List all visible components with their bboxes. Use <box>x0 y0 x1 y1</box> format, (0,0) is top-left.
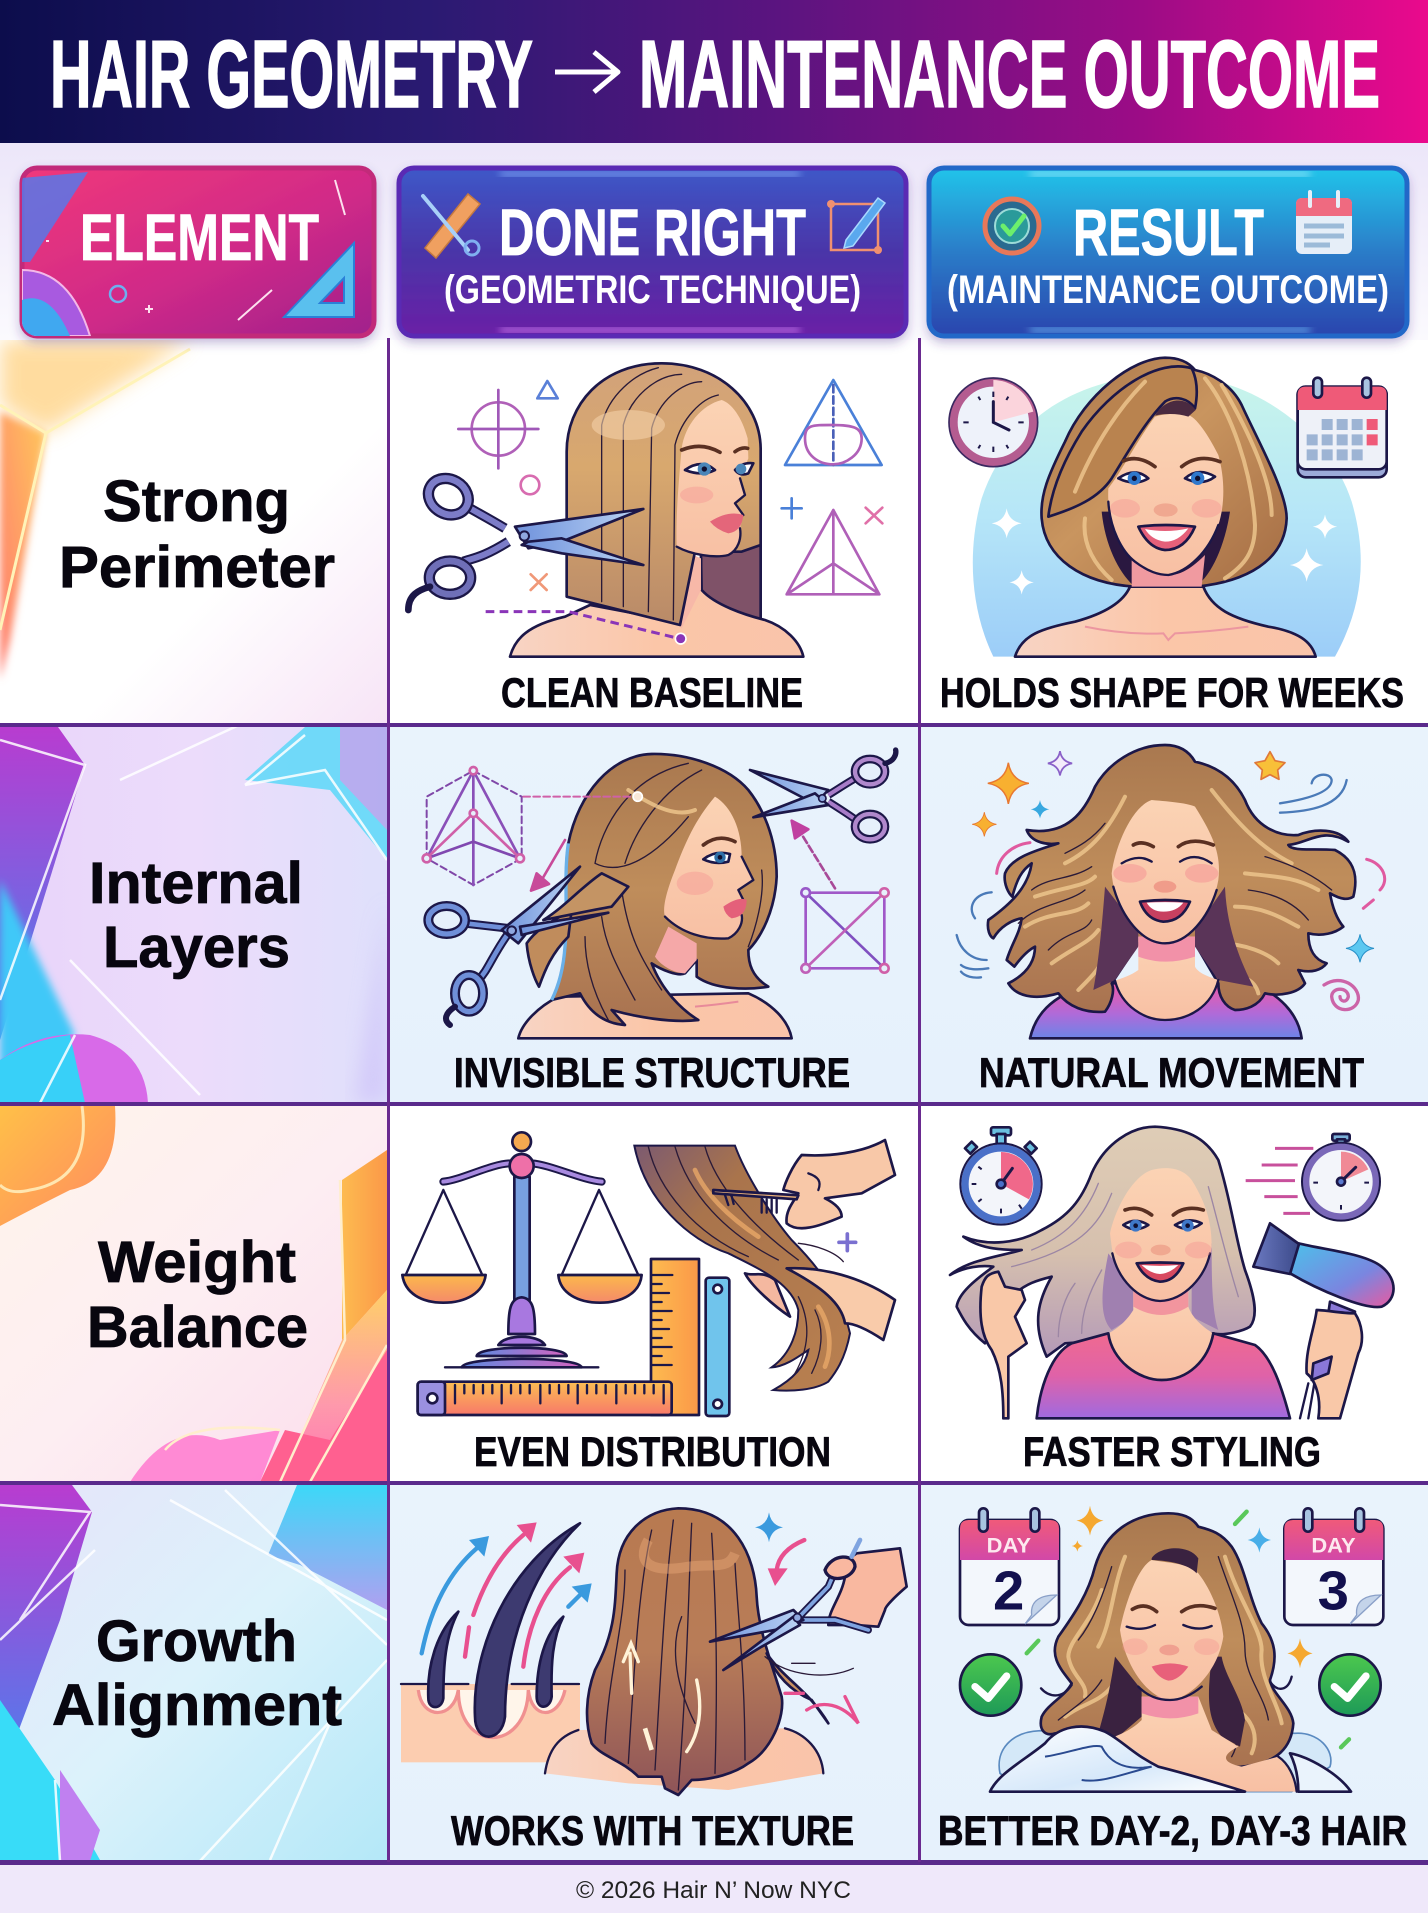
header card: result <box>929 168 1407 336</box>
caption: even distribution: EVEN DISTRIBUTION <box>474 1428 831 1475</box>
title: HAIR GEOMETRY <box>50 21 533 128</box>
geometry <box>423 767 889 973</box>
face <box>1112 800 1219 943</box>
facial features <box>1123 458 1220 467</box>
label: weight balance <box>87 1230 308 1360</box>
title <box>50 21 1380 128</box>
speed lines <box>1246 1148 1313 1213</box>
balance scale <box>402 1132 642 1367</box>
icon: target check <box>985 199 1039 253</box>
label: weight balance: Weight <box>98 1230 296 1295</box>
shoulders <box>518 993 792 1038</box>
neck <box>655 927 697 973</box>
shadow under hair <box>1102 1243 1218 1330</box>
shoulders <box>545 1728 823 1790</box>
L ruler <box>418 1259 699 1415</box>
long hair <box>1041 1513 1293 1767</box>
hair highlights <box>1025 790 1318 993</box>
label: growth alignment: Alignment <box>52 1673 342 1738</box>
side flicks <box>1041 1677 1292 1695</box>
hand with dryer <box>1300 1310 1362 1418</box>
face in profile <box>664 797 753 939</box>
heading: done right: DONE RIGHT <box>499 195 806 269</box>
scissors lower <box>428 867 608 1025</box>
sparkles <box>988 763 1029 804</box>
scissors upper <box>750 750 896 839</box>
title banner <box>0 0 1428 143</box>
header band background <box>0 143 1428 340</box>
label: strong perimeter <box>59 469 335 600</box>
illustration: invisible structure <box>423 750 896 1038</box>
back hair <box>701 512 761 619</box>
caption: faster styling: FASTER STYLING <box>1023 1428 1321 1475</box>
day 3 calendar: DAY <box>1311 1534 1356 1558</box>
shadow under hair <box>1093 887 1253 990</box>
neck and chest <box>1115 1697 1297 1792</box>
scalp cross section <box>401 1523 580 1762</box>
label: growth alignment <box>52 1609 342 1738</box>
dashed baseline <box>486 612 678 638</box>
caption: clean baseline: CLEAN BASELINE <box>501 669 803 716</box>
falling strands <box>767 1653 828 1723</box>
row 4 left panel art <box>0 1485 387 1861</box>
label: strong perimeter: Strong <box>103 469 290 534</box>
halo <box>973 375 1361 657</box>
neck and chest <box>1108 1283 1213 1380</box>
blanket <box>990 1727 1245 1792</box>
caption: natural movement: NATURAL MOVEMENT <box>979 1049 1364 1096</box>
label: weight balance: Balance <box>87 1295 308 1360</box>
layered hair <box>552 754 777 1025</box>
icon: calendar <box>1296 192 1352 254</box>
neck <box>1115 937 1218 1020</box>
illustration: holds shape <box>949 358 1387 657</box>
face <box>1108 414 1223 575</box>
grid lines <box>0 338 1428 1865</box>
row 3 background <box>390 1106 1428 1482</box>
stopwatch left <box>960 1127 1042 1225</box>
sparkles <box>992 508 1022 538</box>
row 1 left panel art <box>0 340 387 725</box>
sparkle <box>839 1234 856 1251</box>
row 4 background <box>390 1485 1428 1861</box>
day 3 calendar: 3 <box>1318 1559 1349 1621</box>
day 3 calendar <box>1284 1508 1383 1625</box>
illustration: natural movement <box>957 745 1385 1038</box>
top hand and comb <box>713 1140 895 1228</box>
caption: works with texture: WORKS WITH TEXTURE <box>451 1807 854 1854</box>
day 2 calendar: DAY <box>987 1534 1031 1558</box>
side tuft <box>527 910 572 987</box>
label: internal layers <box>89 851 303 980</box>
illustration: faster styling <box>950 1127 1394 1418</box>
caption: invisible structure: INVISIBLE STRUCTURE <box>454 1049 850 1096</box>
illustration: clean baseline <box>408 363 882 657</box>
shoulders <box>510 558 803 657</box>
heading: element: ELEMENT <box>80 200 319 274</box>
geometry marks <box>458 380 882 594</box>
blue ruler <box>706 1278 729 1416</box>
header card: element <box>22 168 374 336</box>
raised hand <box>980 1272 1027 1418</box>
heading: result: RESULT <box>1073 195 1264 269</box>
row 2 backgrounds <box>390 727 1428 1103</box>
row 1 background <box>0 340 1428 725</box>
loose strand <box>798 1243 843 1262</box>
clock <box>949 378 1038 467</box>
scissors and hand <box>710 1540 907 1670</box>
face in profile <box>676 400 748 556</box>
face <box>1120 1560 1223 1700</box>
check badges <box>960 1654 1381 1716</box>
shoulders <box>1015 587 1316 657</box>
face <box>1110 1168 1212 1302</box>
day 2 calendar: 2 <box>993 1559 1024 1621</box>
bob hair <box>1041 358 1287 587</box>
subheading: (GEOMETRIC TECHNIQUE) <box>444 268 861 312</box>
arrow and sparkle <box>777 1540 804 1570</box>
footer credit: © 2026 Hair N’ Now NYC <box>576 1877 851 1904</box>
long hair from behind <box>587 1508 782 1795</box>
label: internal layers: Internal <box>89 851 303 916</box>
long blond hair <box>950 1127 1255 1357</box>
header card: done right <box>399 168 906 336</box>
card decoration: shapes <box>22 172 345 336</box>
label: growth alignment: Growth <box>96 1609 297 1674</box>
label: internal layers: Layers <box>103 915 290 980</box>
growth arrows <box>422 1522 592 1667</box>
shirt <box>1030 983 1302 1038</box>
illustration: works with texture <box>401 1508 907 1795</box>
sparkles <box>1076 1506 1104 1536</box>
row 2 left panel art <box>0 720 387 1103</box>
day 2 calendar <box>960 1508 1059 1625</box>
wavy hair <box>988 745 1355 1012</box>
shadow under hair <box>1102 512 1230 586</box>
icon: set square <box>284 243 354 317</box>
shirt <box>1037 1333 1290 1418</box>
bob hair <box>567 363 761 625</box>
calendar <box>1298 378 1387 477</box>
scissors <box>408 471 643 610</box>
swept bang <box>1048 366 1197 517</box>
pillow <box>999 1731 1331 1792</box>
hair dryer <box>1253 1223 1394 1323</box>
illustration: better day-2 day-3 <box>960 1506 1383 1792</box>
motion swirls <box>957 775 1347 978</box>
bottom hand <box>745 1268 895 1340</box>
icon: square and pencil <box>827 198 885 254</box>
shadow under hair <box>1098 1657 1245 1747</box>
icon: ruler and scissors <box>423 194 480 258</box>
illustration: even distribution <box>402 1132 895 1416</box>
stopwatch right <box>1302 1134 1380 1221</box>
label: strong perimeter: Perimeter <box>59 535 335 600</box>
hair lock <box>634 1146 850 1391</box>
row 3 left panel art <box>0 1106 387 1482</box>
